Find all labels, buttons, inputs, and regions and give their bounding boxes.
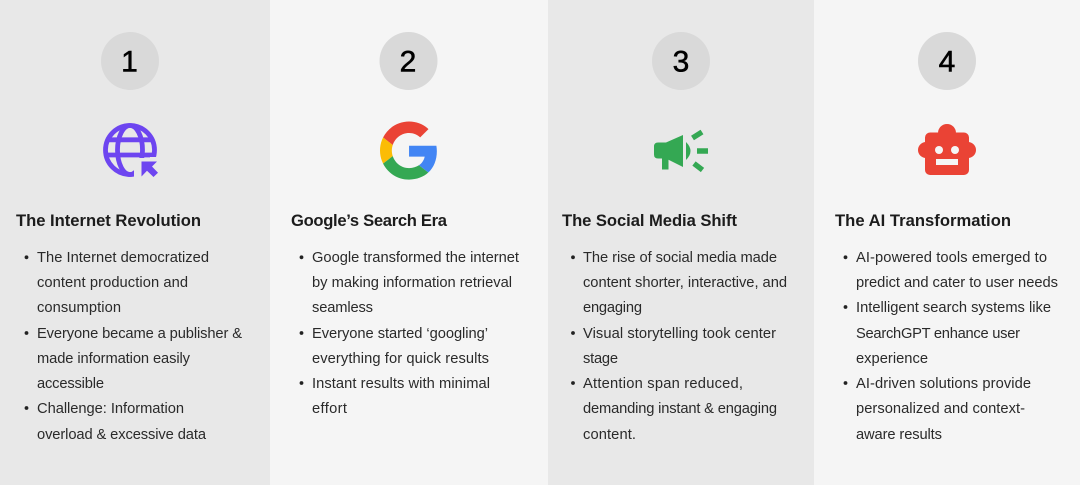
icon: megaphone	[654, 132, 708, 170]
panel: Google's Search Era	[270, 0, 548, 485]
bullet list: stage	[583, 351, 618, 367]
bullet list: content shorter, interactive, and	[583, 275, 787, 291]
bullet list: experience	[856, 351, 928, 367]
bullet list: Everyone became a publisher &	[37, 326, 242, 342]
bullet list: seamless	[312, 300, 373, 316]
bullet list: engaging	[583, 300, 642, 316]
bullet list: by making information retrieval	[312, 275, 512, 291]
number badge 2: 2	[400, 46, 416, 78]
icon: robot	[918, 124, 976, 175]
number badge 2	[380, 32, 438, 90]
bullet list: everything for quick results	[312, 351, 489, 367]
bullet list: Everyone started ‘googling’	[312, 326, 488, 342]
bullet list: content.	[583, 427, 636, 443]
heading: The Social Media Shift	[562, 211, 737, 230]
heading: The Internet Revolution	[16, 211, 201, 230]
bullet list	[571, 250, 787, 443]
bullet list	[300, 250, 519, 417]
bullet list: effort	[312, 401, 347, 417]
number badge 1	[101, 32, 159, 90]
bullet list: demanding instant & engaging	[583, 401, 777, 417]
bullet list: aware results	[856, 427, 942, 443]
bullet list: SearchGPT enhance user	[856, 326, 1020, 342]
bullet list: overload & excessive data	[37, 427, 207, 443]
bullet list: consumption	[37, 300, 121, 316]
bullet list: AI-powered tools emerged to	[856, 250, 1047, 266]
bullet list	[25, 250, 242, 443]
number badge 3	[652, 32, 710, 90]
bullet list: The Internet democratized	[37, 250, 209, 266]
bullet list: The rise of social media made	[583, 250, 777, 266]
bullet list: Visual storytelling took center	[583, 326, 776, 342]
panel: The Social Media Shift	[548, 0, 814, 485]
bullet list: Google transformed the internet	[312, 250, 519, 266]
bullet list: personalized and context-	[856, 401, 1025, 417]
heading: The AI Transformation	[835, 211, 1011, 230]
bullet list: made information easily	[37, 351, 191, 367]
panel: The Internet Revolution	[0, 0, 270, 485]
panel: The AI Transformation	[814, 0, 1080, 485]
bullet list	[844, 250, 1058, 443]
number badge 4: 4	[939, 46, 955, 78]
bullet list: accessible	[37, 376, 104, 392]
heading: Google’s Search Era	[291, 211, 448, 230]
icon: globe with cursor	[106, 126, 162, 182]
number badge 3: 3	[673, 46, 689, 78]
icon: Google G	[380, 122, 437, 180]
bullet list: Instant results with minimal	[312, 376, 490, 392]
bullet list: predict and cater to user needs	[856, 275, 1058, 291]
bullet list: content production and	[37, 275, 188, 291]
bullet list: AI-driven solutions provide	[856, 376, 1031, 392]
number badge 1: 1	[121, 46, 138, 78]
bullet list: Intelligent search systems like	[856, 300, 1051, 316]
bullet list: Attention span reduced,	[583, 376, 743, 392]
number badge 4	[918, 32, 976, 90]
bullet list: Challenge: Information	[37, 401, 184, 417]
